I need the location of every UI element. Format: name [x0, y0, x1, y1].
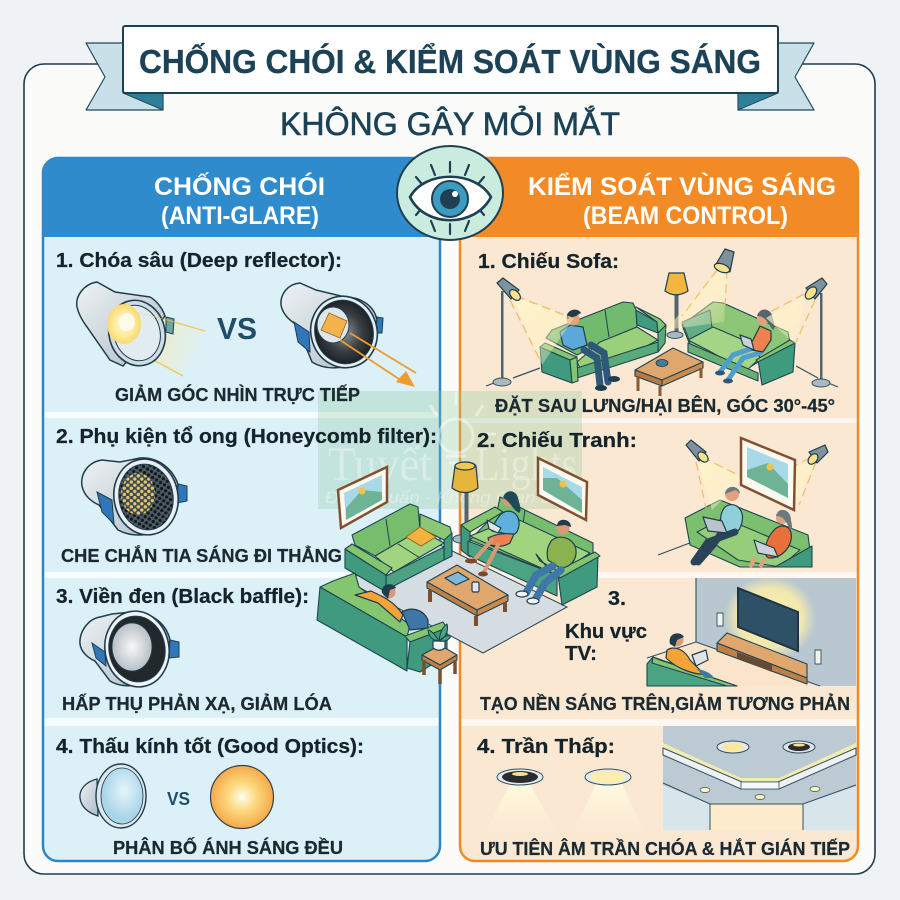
item 3 heading: 3. Viền đen (Black baffle): [56, 586, 309, 608]
panel heading: (BEAM CONTROL) [583, 202, 788, 230]
spot lamps [686, 440, 706, 461]
right sofa with people [461, 491, 600, 605]
item heading: right item 2: 2. Chiếu Tranh: [477, 430, 637, 452]
caption 4: ƯU TIÊN ÂM TRẦN CHÓA & HẮT GIÁN TIẾP [480, 838, 850, 859]
icon: black baffle lamp [80, 606, 179, 692]
title ribbon [86, 26, 814, 110]
floor lamp [452, 462, 478, 543]
left wall picture [338, 467, 387, 528]
TV cabinet [717, 633, 807, 684]
watermark: Đèn Chuẩn - Không Gian Đẹp [325, 488, 575, 507]
panel heading [154, 171, 325, 230]
icon: even light disc [210, 766, 274, 828]
seated man with laptop [694, 487, 743, 562]
top spot lamp and beam [665, 249, 734, 330]
man [584, 345, 608, 385]
illustration: TV zone [647, 576, 856, 686]
illustration: painting lighting scene [658, 438, 828, 567]
icon: recessed deep downlight [484, 769, 558, 835]
icon: deep reflector lamp with arrows [281, 283, 416, 387]
coffee table [635, 348, 703, 396]
icon: good optics lens [80, 764, 146, 828]
woman reading [465, 491, 521, 576]
panel heading [528, 171, 836, 230]
rug [345, 545, 567, 653]
front sofa with man [317, 573, 447, 672]
right spot lamp and beam [766, 278, 830, 387]
caption: right item 1: ĐẶT SAU LƯNG/HẠI BÊN, GÓC 30°-45° [495, 395, 835, 416]
woman [720, 348, 760, 380]
coffee table [427, 565, 508, 626]
caption 3: TẠO NỀN SÁNG TRÊN,GIẢM TƯƠNG PHẢN [480, 693, 850, 714]
panel heading: (ANTI-GLARE) [161, 202, 319, 230]
seated woman with laptop [750, 510, 792, 567]
panel: anti-glare [43, 158, 440, 861]
framed picture [741, 438, 795, 510]
floor lines [486, 366, 838, 387]
floor lamp [665, 273, 688, 338]
watermark bulb [416, 392, 496, 463]
item 1 heading: 1. Chiếu Sofa: [478, 251, 619, 273]
title text: CHỐNG CHÓI & KIỂM SOÁT VÙNG SÁNG [139, 42, 761, 80]
item 3 heading: TV: [565, 643, 597, 665]
TV glow [724, 576, 816, 660]
viewer on sofa [647, 633, 737, 686]
watermark [318, 391, 582, 509]
spotlight beams [696, 456, 745, 510]
illustration: central living room [317, 458, 600, 684]
item 4 heading: 4. Trần Thấp: [477, 736, 615, 758]
icon: central eye badge [397, 146, 503, 240]
side table with plant [422, 624, 457, 684]
item 3 heading: 3. [608, 588, 626, 610]
man with laptop [516, 520, 576, 604]
wall sconces [717, 613, 821, 664]
item 4 heading: 4. Thấu kính tốt (Good Optics): [56, 736, 364, 758]
item 3 heading: Khu vực [565, 621, 647, 643]
item heading: left item 2: 2. Phụ kiện tổ ong (Honeycomb filter): [56, 426, 437, 448]
icon: honeycomb lamp [82, 454, 187, 540]
item 1 heading: 1. Chóa sâu (Deep reflector): [56, 250, 342, 272]
icon: recessed warm downlight [572, 769, 646, 835]
back sofa with cushion [345, 504, 452, 592]
panel: beam control [460, 158, 858, 861]
caption 4: PHÂN BỐ ÁNH SÁNG ĐỀU [113, 837, 343, 858]
sofa right with woman [682, 302, 795, 385]
panel heading: CHỐNG CHÓI [154, 171, 325, 201]
left spot lamp and beam [493, 278, 574, 386]
watermark: Lights [475, 438, 577, 491]
sofa left with man [540, 302, 666, 391]
caption 3: HẤP THỤ PHẢN XẠ, GIẢM LÓA [62, 693, 332, 714]
label: VS: VS [217, 311, 257, 346]
right wall picture [538, 458, 587, 520]
illustration: low ceiling with cove [663, 726, 856, 830]
watermark: Tuyết [328, 438, 433, 491]
icon: reflector lamp with soft beam [77, 282, 205, 376]
illustration: sofa lighting scene [486, 249, 838, 396]
label: small vs: VS [167, 789, 190, 809]
item 3 heading [565, 588, 647, 665]
panel heading: KIỂM SOÁT VÙNG SÁNG [528, 171, 836, 201]
sofa [685, 500, 812, 567]
TV [738, 588, 798, 651]
subtitle: KHÔNG GÂY MỎI MẮT [280, 106, 620, 142]
caption: left item 1: GIẢM GÓC NHÌN TRỰC TIẾP [115, 384, 360, 405]
caption 2: CHE CHẮN TIA SÁNG ĐI THẲNG [61, 545, 342, 566]
